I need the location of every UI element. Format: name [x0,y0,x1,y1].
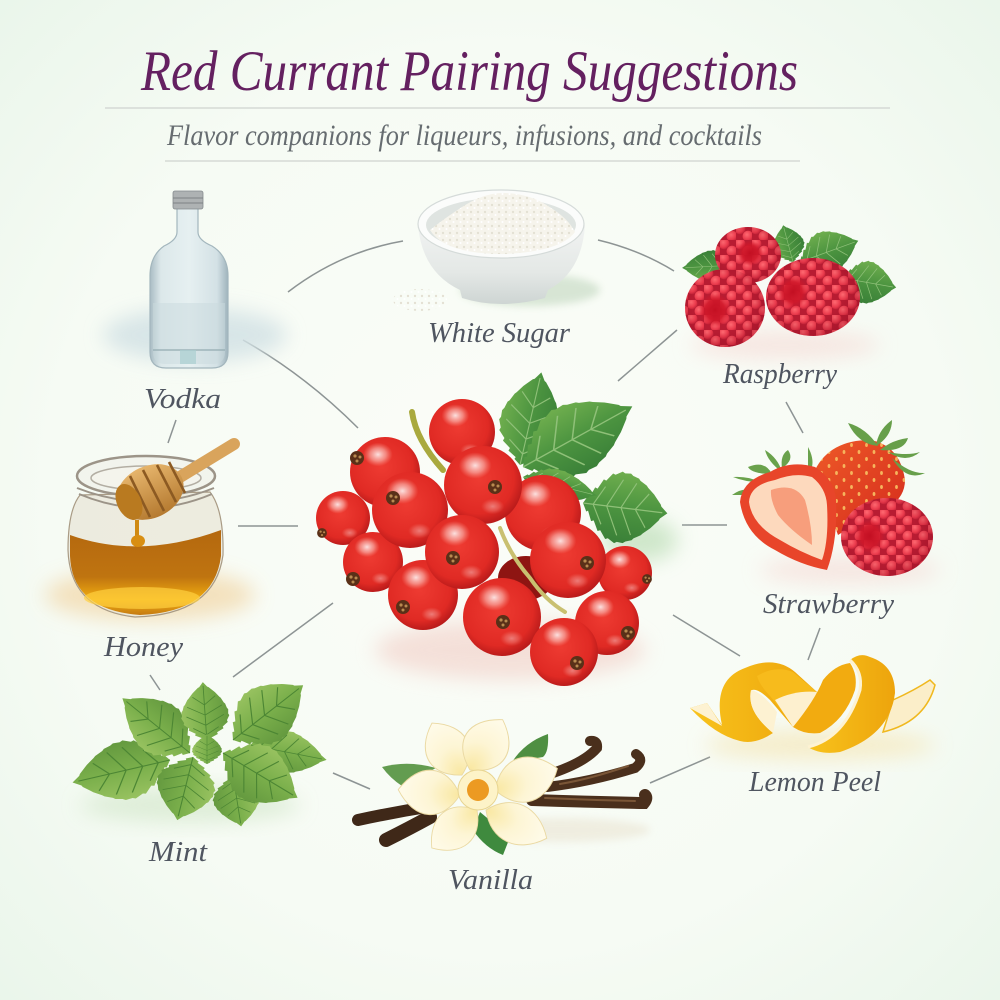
label: vanilla: Vanilla [448,864,533,896]
right tail [883,680,935,732]
right curl [793,663,856,733]
icon: vodka bottle [103,191,287,368]
icon: vanilla flower and pods [358,707,650,863]
label: mint: Mint [148,836,208,868]
icon: sugar bowl [393,190,600,311]
whole strawberry [815,440,905,535]
vanilla pods [358,741,646,840]
connector lines [150,240,820,789]
raspberry leaves [681,220,900,309]
vanilla leaves [382,764,436,786]
currant stems [412,412,565,612]
subtitle: Flavor companions for liqueurs, infusions, and cocktails [166,119,762,152]
title: Red Currant Pairing Suggestions [140,40,798,103]
label: lemon peel: Lemon Peel [748,766,881,798]
currant berries [316,399,652,686]
label: white sugar: White Sugar [428,317,571,349]
label: raspberry: Raspberry [722,358,837,390]
icon: mint [66,662,331,830]
label: vodka: Vodka [144,383,221,415]
icon: strawberries [732,420,940,584]
cut strawberry [732,447,812,495]
currant leaves [490,366,672,549]
label: honey: Honey [103,631,183,663]
vanilla petals [396,707,565,863]
label: strawberry: Strawberry [763,588,894,620]
berry calyx tips [317,451,652,670]
icon: raspberries [681,220,900,359]
left loop [690,662,817,742]
subtitle divider [165,160,800,162]
icon: lemon peel [690,655,935,760]
raspberry beside strawberry [841,498,933,576]
honey dipper [107,444,234,547]
central red currant cluster [316,366,678,686]
icon: honey jar [45,444,255,621]
spilled sugar [393,289,447,311]
title divider [105,107,890,109]
